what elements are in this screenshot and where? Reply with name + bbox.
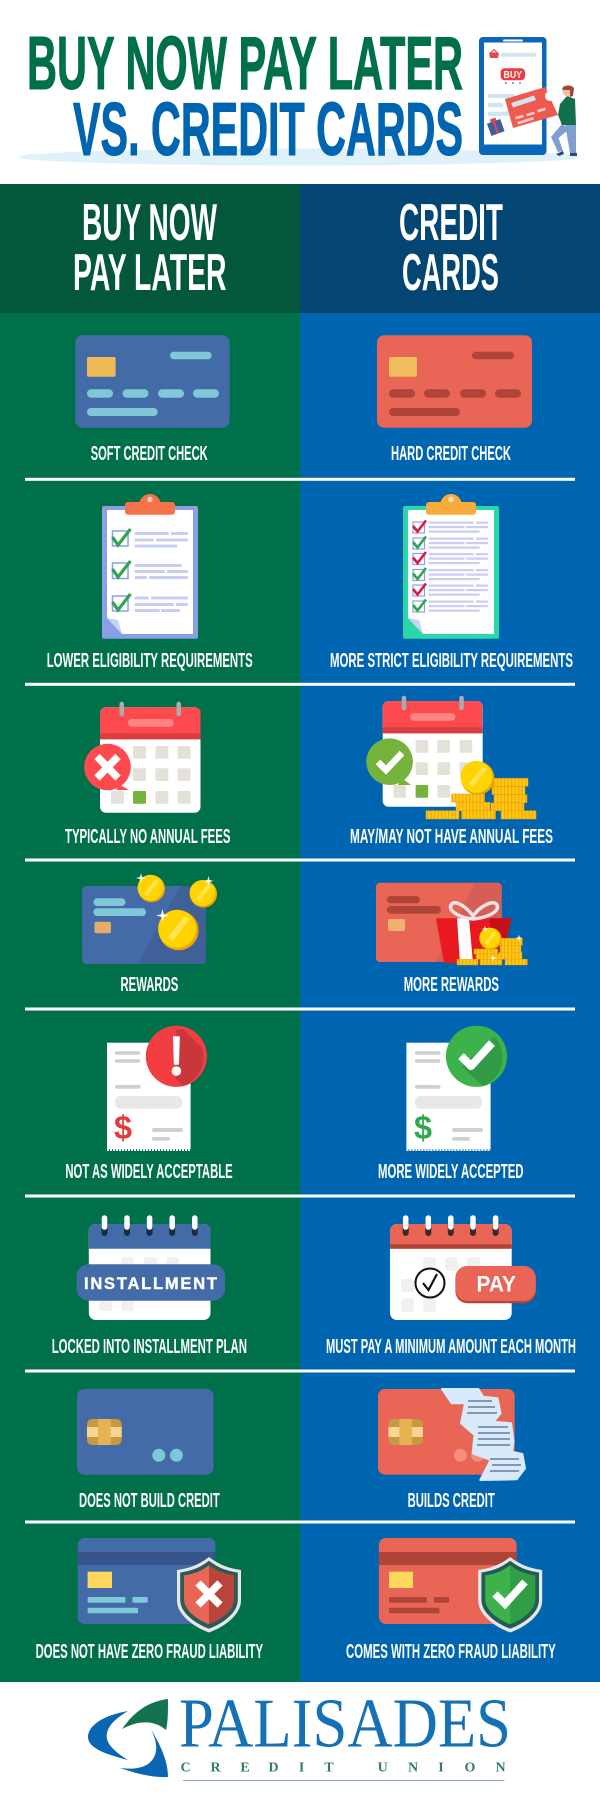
logo: palisades credit union: I bbox=[299, 1760, 304, 1776]
logo: palisades credit union: N bbox=[496, 1760, 506, 1776]
icon: calendar with check bubble and coins bbox=[366, 696, 536, 819]
icon: red card with gift and coins bbox=[376, 883, 527, 965]
logo: palisades credit union: O bbox=[465, 1760, 476, 1776]
panel: left column header: BUY NOW bbox=[82, 194, 217, 252]
logo: palisades credit union: PALISADES bbox=[179, 1686, 511, 1762]
logo: palisades credit union bbox=[88, 1686, 511, 1781]
icon: pay calendar: PAY bbox=[476, 1272, 516, 1297]
panel: right column header: CREDIT bbox=[399, 194, 503, 252]
icon: red card with green shield bbox=[379, 1538, 542, 1632]
label: soft credit check: SOFT CREDIT CHECK bbox=[91, 443, 208, 465]
panel: right column header bbox=[300, 184, 600, 313]
icon: red credit card bbox=[377, 335, 532, 428]
icon: receipt with exclamation bbox=[107, 1026, 207, 1150]
icon: blue credit card bbox=[75, 335, 230, 428]
label: locked into installment plan: LOCKED INTO INSTALLMENT PLAN bbox=[52, 1336, 247, 1358]
icon: blue card with chip bbox=[77, 1389, 214, 1475]
icon: blue card with coins bbox=[82, 873, 217, 964]
panel: left column header bbox=[0, 184, 300, 313]
logo swirl bbox=[88, 1699, 168, 1777]
logo: palisades credit union: E bbox=[240, 1760, 250, 1776]
icon: installment calendar: INSTALLMENT bbox=[84, 1275, 217, 1293]
label: builds credit: BUILDS CREDIT bbox=[408, 1490, 495, 1512]
title bbox=[19, 21, 580, 171]
icon: receipt with check bbox=[406, 1026, 507, 1150]
icon: pay calendar bbox=[390, 1218, 536, 1320]
icon: calendar with x bubble bbox=[84, 702, 200, 813]
label: lower eligibility requirements: LOWER ELIGIBILITY REQUIREMENTS bbox=[47, 650, 253, 672]
label: hard credit check: HARD CREDIT CHECK bbox=[391, 443, 511, 465]
icon: clipboard with six checks bbox=[403, 494, 499, 639]
icon: phone with shopper and credit card bbox=[479, 37, 577, 156]
label: typically no annual fees: TYPICALLY NO ANNUAL FEES bbox=[65, 826, 230, 848]
icon: installment calendar bbox=[76, 1218, 225, 1320]
logo: palisades credit union: D bbox=[269, 1760, 279, 1776]
icon: receipt with check: $ bbox=[414, 1109, 432, 1146]
logo: palisades credit union: U bbox=[378, 1760, 388, 1776]
logo: palisades credit union: N bbox=[408, 1760, 418, 1776]
icon: blue card with red shield bbox=[78, 1538, 241, 1632]
logo: palisades credit union: C bbox=[181, 1760, 191, 1776]
icon: receipt with exclamation: $ bbox=[114, 1109, 132, 1146]
panel: left column header: PAY LATER bbox=[73, 244, 226, 302]
label: does not have zero fraud liability: DOES NOT HAVE ZERO FRAUD LIABILITY bbox=[36, 1641, 263, 1663]
panel: right column body bbox=[300, 313, 600, 1682]
logo: palisades credit union: R bbox=[210, 1760, 221, 1776]
panel: right column header: CARDS bbox=[402, 244, 499, 302]
label: not as widely acceptable: NOT AS WIDELY ACCEPTABLE bbox=[65, 1161, 233, 1183]
label: rewards: REWARDS bbox=[120, 974, 178, 996]
panel: left column body bbox=[0, 313, 300, 1682]
icon: phone with shopper and credit card: BUY bbox=[504, 69, 522, 81]
label: does not build credit: DOES NOT BUILD CREDIT bbox=[79, 1490, 220, 1512]
label: more rewards: MORE REWARDS bbox=[404, 974, 499, 996]
logo: palisades credit union: I bbox=[438, 1760, 444, 1776]
logo: palisades credit union: T bbox=[324, 1760, 334, 1776]
icon: clipboard with three checks bbox=[102, 494, 198, 639]
icon: red card with statement ribbon bbox=[378, 1389, 525, 1480]
